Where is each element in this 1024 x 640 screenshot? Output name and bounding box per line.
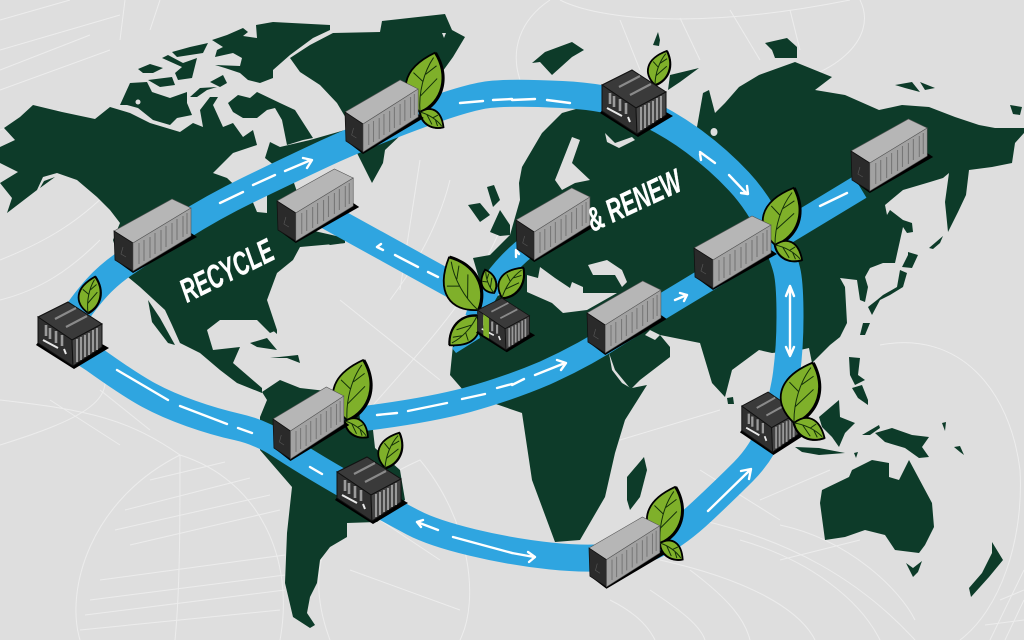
label: & RENEW: & RENEW [580,161,689,238]
container: North America [114,199,197,273]
lane markings and arrows [117,99,847,562]
shipping route: main loop [65,93,790,558]
container: USA [277,169,359,243]
arctic islands [120,22,330,145]
leaf: small South Atlantic [655,535,689,566]
island: Madagascar [627,457,647,510]
grey containers [114,80,933,589]
dark container: Arctic [600,70,673,137]
continent: Australia [820,460,934,553]
leaf: Indian Ocean small [789,412,830,447]
container: Europe [516,188,596,262]
leaf: Caribbean container [326,353,380,426]
region: Labrador [265,130,345,170]
container: Siberia [851,119,933,193]
leaves behind containers [76,46,810,566]
leaf: South Atlantic container [641,481,691,549]
leaf: Arctic dark container [643,46,676,89]
dark container: Brazil [335,457,408,524]
leaf: Central Asia container [755,181,810,252]
continents: Eurasia and Africa [450,62,1024,542]
dark container: centre with green stripe [476,298,535,352]
leaf: North Atlantic container [400,47,451,118]
shipping route: Atlantic to Siberia [360,187,860,419]
island: Greenland [290,14,465,183]
leaf: small Central Asia [770,235,808,268]
island: New Zealand [969,542,1003,597]
container: Labrador [345,80,424,154]
leaf: centre lower [441,308,488,355]
leaf: centre large [431,248,493,321]
label: RECYCLE: RECYCLE [174,231,280,309]
other islands [40,32,1022,458]
island: Tasmania [906,561,922,577]
container: Caribbean [273,387,349,461]
continent: North America [0,97,345,393]
leaf: small Caribbean [340,413,374,444]
continent: South America [260,380,405,628]
container: Central Asia [694,216,777,290]
shipping route: centre stub [452,330,480,353]
dark container: Pacific [36,302,109,369]
shipping route: North America to Europe [325,215,470,295]
leaf: Indian Ocean large [773,355,830,430]
leaf: small North Atlantic [415,104,449,134]
container: South Atlantic [589,517,665,589]
leaf: Brazil dark container [373,427,409,473]
shipping route: centre to Europe [476,246,528,318]
dark containers [36,70,804,524]
leaf: centre middle [477,267,501,297]
dark container: Indian Ocean [740,392,804,455]
leaf: Pacific dark container [76,274,105,316]
leaf: centre right [491,260,532,305]
container: Middle East [587,281,667,355]
seas and lakes [136,33,718,390]
